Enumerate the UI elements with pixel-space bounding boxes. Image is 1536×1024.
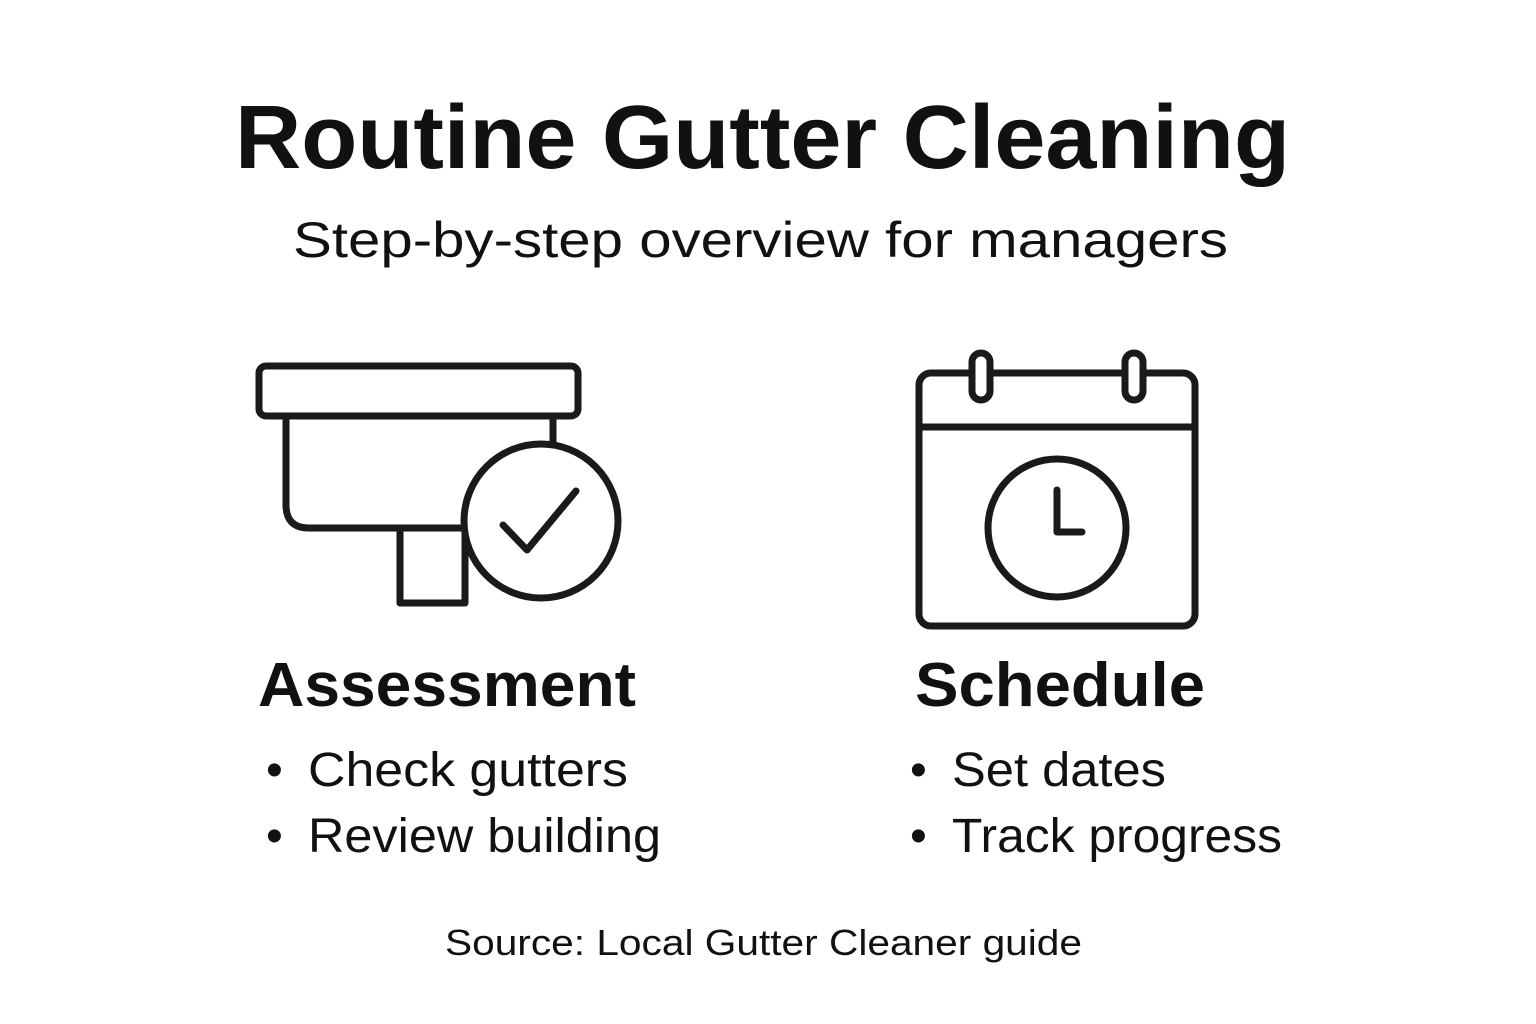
list: schedule bullets <box>910 744 1282 863</box>
list: schedule bullets: • <box>910 744 927 797</box>
title: Routine Gutter Cleaning <box>235 88 1290 188</box>
list: assessment bullets <box>266 744 661 863</box>
heading: Assessment: Assessment <box>258 651 636 720</box>
icon: gutter with check <box>259 366 618 603</box>
heading: Schedule: Schedule <box>915 651 1205 720</box>
list: assessment bullets: Check gutters <box>308 744 628 797</box>
subtitle: Step-by-step overview for managers <box>293 212 1228 268</box>
source note: Source: Local Gutter Cleaner guide <box>445 922 1082 963</box>
list: assessment bullets: Review building <box>308 810 661 863</box>
icon: calendar with clock <box>919 353 1195 626</box>
list: schedule bullets: • <box>910 810 927 863</box>
list: schedule bullets: Set dates <box>952 744 1166 797</box>
list: schedule bullets: Track progress <box>952 810 1282 863</box>
list: assessment bullets: • <box>266 744 283 797</box>
list: assessment bullets: • <box>266 810 283 863</box>
